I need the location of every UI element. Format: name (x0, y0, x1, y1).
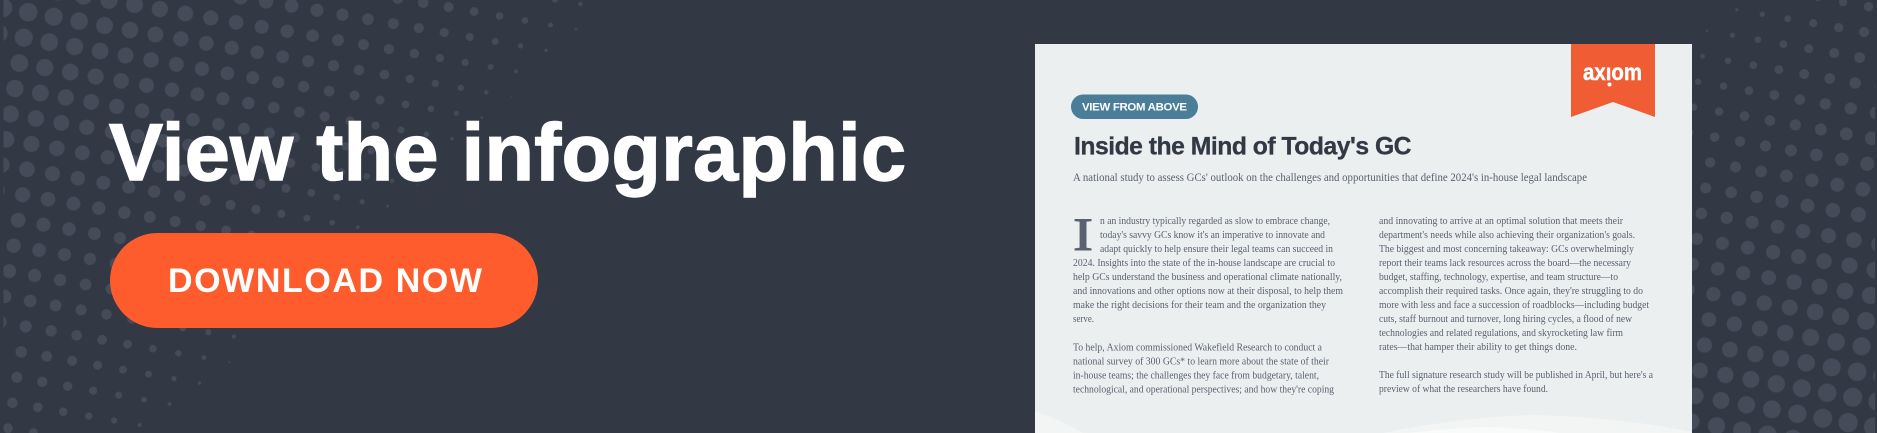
badge: view from above (1071, 94, 1198, 119)
body text: right column: cuts, staff burnout and turnover, long hiring cycles, a flood of new (1379, 313, 1632, 325)
body text: left column: in-house teams; the challenges they face from budgetary, talent, (1073, 370, 1319, 382)
document subtitle: A national study to assess GCs' outlook on the challenges and opportunities that define 2024's in-house legal landscape (1073, 171, 1587, 184)
body text: left column: n an industry typically regarded as slow to embrace change, (1100, 215, 1330, 227)
bottom wave decoration (1035, 411, 1692, 433)
body text: left column: and innovations and other options now at their disposal, to help them (1073, 285, 1343, 297)
body text: left column: To help, Axiom commissioned Wakefield Research to conduct a (1073, 342, 1322, 354)
halftone dots: left (4, 0, 804, 433)
halftone dots: right (1500, 0, 1875, 433)
body text: left column: today's savvy GCs know it's an imperative to innovate and (1100, 229, 1325, 241)
ribbon logo: axiom (1571, 44, 1655, 117)
body text: right column: The biggest and most concerning takeaway: GCs overwhelmingly (1379, 243, 1634, 255)
body text: left column (1073, 215, 1343, 396)
panel: document preview (1035, 44, 1692, 433)
body text: left column: adapt quickly to help ensure their legal teams can succeed in (1100, 243, 1333, 255)
body text: right column: more with less and face a succession of roadblocks—including budget (1379, 299, 1649, 311)
body text: right column: technologies and related regulations, and skyrocketing law firm (1379, 327, 1623, 339)
body text: left column: technological, and operational perspectives; and how they're coping (1073, 384, 1334, 396)
body text: right column: budget, staffing, technology, expertise, and team structure—to (1379, 271, 1618, 283)
body text: right column: preview of what the researchers have found. (1379, 383, 1548, 395)
body text: right column: and innovating to arrive at an optimal solution that meets their (1379, 215, 1623, 227)
title: View the infographic (109, 108, 906, 198)
button: download now (110, 233, 538, 328)
body text: left column: help GCs understand the business and operational climate nationally, (1073, 271, 1342, 283)
body text: right column (1379, 215, 1653, 395)
body text: left column: make the right decisions for their team and the organization they (1073, 299, 1326, 311)
ribbon logo: axiom: axiom (1583, 59, 1642, 85)
button: download now: DOWNLOAD NOW (168, 262, 483, 300)
body text: right column: department's needs while also achieving their organization's goals. (1379, 229, 1635, 241)
body text: left column: serve. (1073, 313, 1094, 325)
body text: right column: report their teams lack resources across the board—the necessary (1379, 257, 1631, 269)
drop cap: I (1073, 209, 1093, 261)
body text: left column: national survey of 300 GCs* to learn more about the state of their (1073, 356, 1329, 368)
body text: right column: rates—that hamper their ability to get things done. (1379, 341, 1577, 353)
badge: view from above: VIEW FROM ABOVE (1082, 102, 1187, 114)
document heading: Inside the Mind of Today's GC (1074, 134, 1412, 160)
body text: right column: accomplish their required tasks. Once again, they're struggling to do (1379, 285, 1643, 297)
body text: left column: 2024. Insights into the state of the in-house landscape are crucial to (1073, 257, 1335, 269)
body text: right column: The full signature research study will be published in April, but here's a (1379, 369, 1653, 381)
